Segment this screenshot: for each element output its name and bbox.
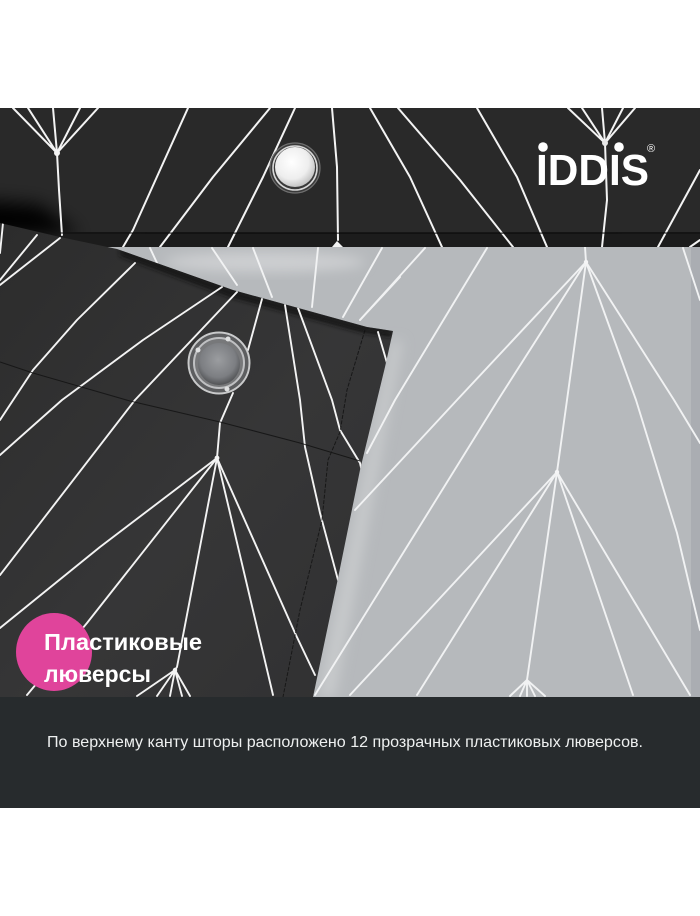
icon: pink circle marker xyxy=(16,613,92,691)
heading: plastic eyelets xyxy=(44,629,202,687)
icon: transparent plastic eyelet on folded corner xyxy=(188,332,250,394)
heading: plastic eyelets: люверсы xyxy=(44,661,151,687)
stitching on folded corner xyxy=(0,330,365,697)
panel: grey reverse side of curtain xyxy=(108,247,700,697)
panel: black top hem of curtain xyxy=(0,108,700,247)
panel: dark caption band xyxy=(0,697,700,808)
icon: iddis logo: ® xyxy=(647,143,655,155)
curtain photo xyxy=(0,108,700,700)
icon: metal eyelet on top hem xyxy=(270,143,320,193)
panel: folded black corner of curtain xyxy=(0,220,400,700)
heading: plastic eyelets: Пластиковые xyxy=(44,629,202,655)
caption text: По верхнему канту шторы расположено 12 прозрачных пластиковых люверсов. xyxy=(47,734,643,751)
icon: iddis logo: IDDIS xyxy=(536,146,649,195)
